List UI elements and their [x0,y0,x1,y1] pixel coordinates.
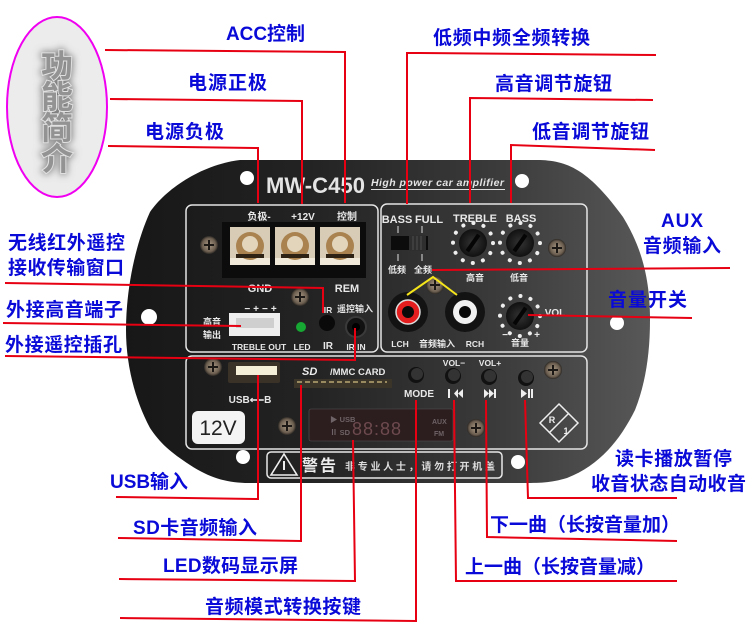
USB port: USB⟵B [229,395,271,406]
volume knob: − [502,330,508,341]
callout: IR receiver window: 接收传输窗口 [8,256,124,279]
12V tag: 12V [199,417,237,440]
R1 diamond: 1 [563,426,569,436]
warning strip: 非专业人士，请勿打开机盖 [345,460,495,473]
badge: function overview oval: 功 [41,48,73,84]
badge: function overview oval: 能 [41,79,73,115]
bass/full switch [382,214,443,275]
treble out connector: 输出 [203,329,221,340]
control buttons: VOL+ [479,358,501,368]
badge: function overview oval: 简 [41,110,73,146]
subtitle: High power car amplifier [371,177,505,189]
SD card slot: /MMC CARD [330,367,386,378]
LED display: FM [434,431,444,438]
bass/full switch: 低频 [388,264,406,275]
treble knob: 高音 [466,272,484,283]
callout: SD input [118,385,301,541]
model title: MW-C450 [266,173,365,198]
callout: power positive [110,72,302,204]
bass/full switch: BASS [382,214,412,226]
control buttons: MODE [404,389,434,400]
callout: LED display: LED数码显示屏 [163,555,298,577]
callout: AUX input: 音频输入 [643,234,721,257]
bass knob: BASS [506,213,536,225]
warning strip [267,452,502,478]
treble out connector: −+−+ [244,304,280,315]
callout: AUX input: AUX [661,211,703,232]
bass knob: 低音 [510,272,528,283]
bass knob [500,213,540,283]
volume knob: + [534,330,540,341]
callout: power negative [108,121,258,203]
callout: play pause: 读卡播放暂停 [615,448,732,470]
callout: volume switch: 音量开关 [608,288,687,311]
callout: previous track [454,400,677,581]
callout: treble knob: 高音调节旋钮 [495,72,612,95]
callout: remote jack [5,328,355,360]
callout: LED display [119,440,355,581]
callout: power negative: 电源负极 [145,121,224,143]
volume knob: VOL [545,308,565,319]
treble out connector [203,304,287,352]
badge: function overview oval: 介 [41,141,73,177]
USB port [228,362,280,406]
badge: function overview oval: 简 [41,110,73,146]
IR in jack: 遥控输入 [337,303,373,314]
mounting holes [141,171,624,469]
IR in jack [337,303,373,352]
LED [294,322,310,352]
callout: bass knob: 低音调节旋钮 [532,120,649,143]
R1 diamond [540,404,578,442]
yellow bracket for audio input [407,277,457,295]
treble out connector: TREBLE OUT [232,342,287,352]
callout: volume switch [528,288,692,318]
callout: bass knob [511,120,655,203]
callout: play pause [525,400,746,498]
warning strip: 警告 [302,457,336,475]
amplifier panel [126,160,650,483]
callout: IR receiver window [5,231,323,313]
RCA inputs [388,292,485,349]
LED display [309,409,453,441]
screws [200,236,566,437]
board plate [126,160,650,483]
bass/full switch: FULL [415,214,443,226]
treble knob [453,213,497,283]
panel outlines [186,204,587,449]
control buttons [404,358,534,400]
power terminal block [222,210,366,295]
callout: mode button [120,400,416,621]
callout: previous track: 上一曲（长按音量减） [465,555,655,578]
badge: function overview oval: 功 [41,48,73,84]
RCA inputs: RCH [466,339,484,349]
control buttons: VOL− [443,358,465,368]
callout: IR receiver window: 无线红外遥控 [8,231,125,254]
callout: power positive: 电源正极 [188,72,267,94]
callout: mode button: 音频模式转换按键 [205,595,361,618]
power terminal block: 控制 [337,210,357,223]
callout: AUX input [432,211,730,270]
callout: treble terminal [3,298,241,326]
callout: ACC control [105,22,345,203]
callout: treble knob [470,72,653,203]
treble knob: TREBLE [453,213,497,225]
SD card slot [294,366,392,388]
callout: treble terminal: 外接高音端子 [6,298,123,321]
power terminal block: REM [335,283,359,295]
RCA inputs: LCH [391,339,409,349]
SD card slot: SD [302,366,317,378]
callout: bass mid full switch [407,26,656,204]
power terminal block: 负极- [247,210,271,223]
treble out connector: 高音 [203,316,221,327]
power terminal block: GND [248,283,272,295]
LED display: Ⅱ SD [330,428,351,437]
callout: next track [486,400,680,541]
badge: function overview oval: 介 [41,141,73,177]
IR window [319,305,335,352]
callout: USB input [110,375,258,499]
badge: function overview oval: 能 [41,79,73,115]
callout: bass mid full switch: 低频中频全频转换 [433,26,590,49]
volume knob: 音量 [511,337,529,348]
callout: play pause: 收音状态自动收音 [591,472,746,495]
power terminal block: +12V [291,212,315,223]
R1 diamond: R [549,415,556,425]
callout: SD input: SD卡音频输入 [133,516,257,539]
LED display: 88:88 [352,419,402,439]
callout: remote jack: 外接遥控插孔 [5,333,122,356]
callout: next track: 下一曲（长按音量加） [490,513,680,536]
badge: function overview oval [7,17,107,197]
LED display: AUX [432,419,447,426]
RCA inputs: 音频输入 [419,338,455,349]
LED: LED [294,342,310,352]
volume knob [500,296,565,348]
callout: USB input: USB输入 [110,470,188,493]
12V tag [192,411,245,444]
callout: ACC control: ACC控制 [226,22,305,45]
IR window: IR [323,341,334,352]
IR in jack: IR IN [346,342,366,352]
IR window: IR [324,305,332,315]
bass/full switch: 全频 [414,264,432,275]
LED display: ▶ USB [330,415,356,424]
